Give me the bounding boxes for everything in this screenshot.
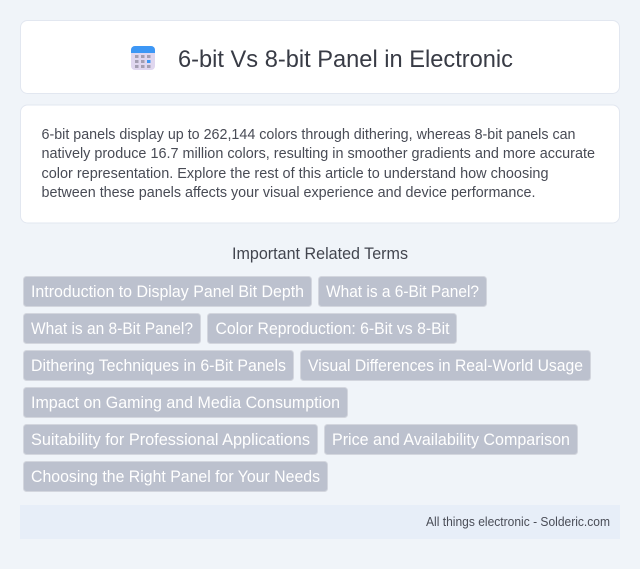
tag: dithering <box>24 350 294 380</box>
tag: introduction <box>24 276 312 306</box>
icon: calendar grid <box>131 46 155 70</box>
tag: visual differences <box>300 350 590 380</box>
tag: gaming and media: Impact on Gaming and Media Consumption <box>31 394 340 412</box>
related term tags <box>24 276 590 492</box>
tag: professional applications <box>24 424 318 454</box>
tag: visual differences: Visual Differences in Real-World Usage <box>308 357 583 375</box>
heading: important related terms: Important Related Terms <box>232 245 408 263</box>
tag: color reproduction: Color Reproduction: 6-Bit vs 8-Bit <box>216 320 450 338</box>
tag: 8-bit panel: What is an 8-Bit Panel? <box>31 320 193 338</box>
panel: summary text: 6-bit panels display up to 262,144 colors through dithering, whereas 8-bit panels can <box>42 127 576 143</box>
panel: summary text: color representation. Explore the rest of this article to understand how choosing <box>42 166 548 182</box>
footer: All things electronic - Solderic.com <box>426 515 610 529</box>
tag: 6-bit panel <box>318 276 486 306</box>
tag: price comparison <box>324 424 578 454</box>
tag: price comparison: Price and Availability Comparison <box>332 431 570 449</box>
tag: professional applications: Suitability for Professional Applications <box>31 431 310 449</box>
panel: summary text: between these panels affects your visual experience and device performance. <box>42 185 536 201</box>
tag: introduction: Introduction to Display Panel Bit Depth <box>31 283 304 301</box>
footer <box>20 505 620 539</box>
tag: gaming and media <box>24 388 348 418</box>
tag: choosing panel: Choosing the Right Panel for Your Needs <box>31 468 320 486</box>
panel: summary text <box>20 105 620 223</box>
title: 6-bit Vs 8-bit Panel in Electronic <box>178 46 513 73</box>
panel: summary text: natively produce 16.7 million colors, resulting in smoother gradients and more accurate <box>42 146 595 162</box>
tag: dithering: Dithering Techniques in 6-Bit Panels <box>31 357 286 375</box>
tag: 6-bit panel: What is a 6-Bit Panel? <box>326 283 479 301</box>
header panel <box>20 20 620 94</box>
tag: color reproduction <box>208 314 456 344</box>
tag: choosing panel <box>24 462 328 492</box>
tag: 8-bit panel <box>24 314 200 344</box>
